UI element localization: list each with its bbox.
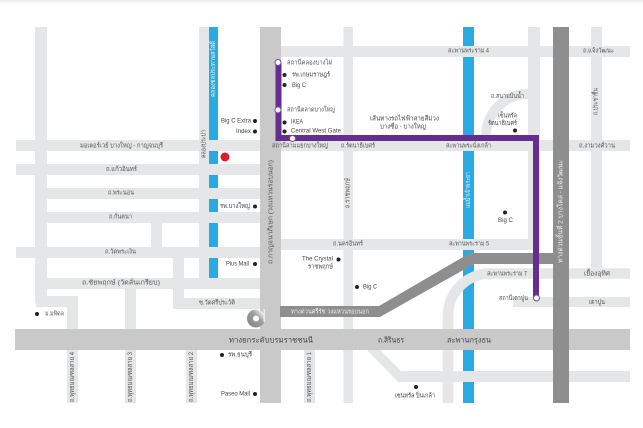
landmark labels: west: รพ.บางใหญ่: [220, 202, 250, 210]
landmark labels: east: รัตนาธิเบศร์: [488, 119, 517, 127]
road labels: east: เตาปูน: [589, 299, 605, 306]
landmark labels: east: เซนทรัล ปิ่นเกล้า: [395, 390, 435, 400]
vertical road labels: ถ.พุทธมณฑลสาย 3: [127, 352, 134, 402]
road labels: east: เยื้องอุทิศ: [584, 268, 611, 278]
landmark labels: east: Big C: [498, 217, 513, 224]
landmark labels: west: [220, 118, 252, 398]
callout: purple line route: [370, 114, 439, 130]
landmark labels: west: Index: [236, 128, 252, 135]
purple line: [275, 60, 540, 301]
road labels: east: สะพานพระราม 4: [448, 48, 489, 54]
road labels: east: สะพานพระนั่งเกล้า: [446, 140, 491, 150]
waterways: [209, 27, 474, 403]
road labels: west: ถ.แก้วอินทร์: [106, 165, 137, 173]
vertical road labels: ถ.ราชพฤกษ์: [344, 177, 352, 208]
landmark labels: purple line: Big C: [292, 82, 306, 89]
road labels: east: ทางด่วนศรีรัช วงแหวนรอบนอก: [291, 308, 369, 316]
landmark dots: [35, 73, 517, 396]
vertical road labels: ถ.พุทธมณฑลสาย 4: [69, 352, 76, 402]
purple line station labels: สถานีเตาปูน: [499, 294, 528, 302]
vertical road labels: ถ.พุทธมณฑลสาย 1: [306, 352, 313, 402]
landmark labels: east: Big C: [363, 284, 377, 290]
expressway: Si Rat: [280, 27, 569, 403]
expressway labels: สะพานกรุงธน: [447, 336, 491, 344]
road labels: east: ถ.นครอินทร์: [333, 240, 363, 248]
landmark labels: purple line: Central West Gate: [291, 128, 341, 134]
callout: purple line route: เส้นทางรถไฟฟ้าสายสีม่วง: [370, 114, 439, 122]
road labels: east: ถ.แจ้งวัฒนะ: [583, 46, 614, 54]
landmark labels: purple line: [291, 70, 341, 134]
road labels: west: ถ.กันตนา: [109, 212, 132, 220]
expressway labels: ทางยกระดับบรมราชชนนี: [229, 336, 313, 344]
landmark labels: east: เซ็นทรัล: [498, 110, 517, 120]
callout: purple line route: บางซื่อ - บางใหญ่: [380, 122, 426, 130]
purple line station labels: สถานีสามแยกบางใหญ่: [272, 142, 328, 150]
road labels: east: สะพานพระราม 7: [487, 270, 527, 278]
vertical road labels: ถ.กาญจนาภิเษก (วงแหวนรอบนอก): [266, 160, 274, 264]
landmark labels: east: [302, 110, 517, 400]
purple line station labels: [272, 58, 528, 302]
road labels: east: ถ.งามวงศ์วาน: [579, 142, 616, 150]
landmark labels: purple line: รพ.เกษมราษฎร์: [292, 70, 330, 78]
vertical road labels: คลองประปา: [200, 130, 208, 158]
vertical road labels: คลองชลประทานสวัสดิ์: [208, 40, 217, 97]
road labels: west: มอเตอร์เวย์ บางใหญ่ - กาญจนบุรี: [80, 142, 163, 150]
road labels: east: ถ.รัตนาธิเบศร์: [341, 142, 375, 150]
road labels: west: ซ.วัดศรีประวัติ: [199, 298, 235, 306]
vertical road labels: แม่น้ำเจ้าพระยา: [463, 172, 472, 208]
road labels: west: ม.มหิดล: [45, 310, 64, 318]
road labels: west: ถ.ชัยพฤกษ์ (วัดลั่นเกรียบ): [82, 278, 160, 286]
road labels: east: ถ.สนามบินน้ำ: [491, 91, 524, 100]
expressway labels: [229, 336, 491, 344]
landmark labels: west: Paseo Mall: [221, 390, 250, 398]
vertical road labels: ถ.พุทธมณฑลสาย 2: [188, 352, 195, 402]
vertical road labels: ทางด่วนขั้นที่ 2 บางโคล่ - แจ้งวัฒนะ: [556, 160, 564, 263]
landmark labels: east: ราชพฤกษ์: [308, 262, 334, 270]
vertical road labels: [69, 40, 600, 402]
purple line station labels: สถานีคลองบางไผ่: [287, 58, 332, 66]
road labels: west: [45, 142, 235, 318]
purple line station labels: สถานีตลาดบางใหญ่: [287, 106, 335, 114]
expressway labels: ถ.สิรินธร: [378, 336, 404, 344]
vertical road labels: ถ.ประชาชื่น: [590, 88, 600, 115]
landmark labels: west: Plus Mall: [226, 260, 249, 268]
icon: location marker: [220, 152, 230, 162]
road labels: east: [291, 46, 616, 316]
landmark labels: purple line: IKEA: [291, 118, 304, 126]
landmark labels: west: Big C Extra: [221, 118, 251, 124]
landmark labels: east: The Crystal: [302, 256, 334, 262]
icon: interchange logo: [250, 309, 265, 324]
road labels: east: สะพานพระราม 5: [449, 240, 489, 248]
road labels: west: ถ.พระนอน: [108, 190, 134, 196]
road labels: west: ถ.วัดพระเงิน: [105, 248, 136, 256]
landmark labels: west: รพ.ธนบุรี: [228, 350, 252, 358]
